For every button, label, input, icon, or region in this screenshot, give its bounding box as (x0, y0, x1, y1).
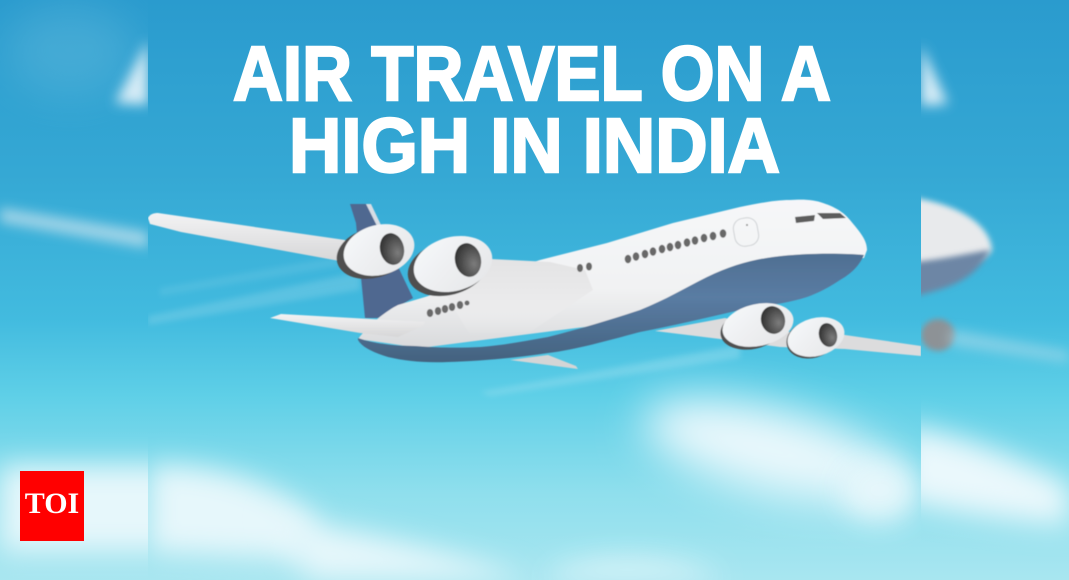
logo: TOI: TOI (25, 487, 79, 520)
far wing right (655, 318, 921, 356)
engine near right (720, 302, 794, 350)
title (233, 31, 831, 189)
wing root (468, 258, 592, 290)
belly (358, 254, 864, 362)
engine far left (336, 223, 416, 280)
clouds (148, 378, 920, 580)
fuselage (358, 200, 867, 348)
rear windows (427, 300, 470, 317)
logo: TOI (20, 471, 84, 541)
front windows (577, 229, 726, 272)
door (732, 217, 760, 247)
tailplane (270, 313, 398, 336)
tail fin (350, 204, 413, 318)
lower wing stub (510, 355, 578, 369)
panel: blurred right background (921, 0, 1069, 580)
contrail streaks (148, 256, 740, 396)
title: HIGH IN INDIA (289, 103, 780, 189)
airplane (148, 200, 921, 369)
cockpit windows (795, 213, 846, 223)
panel: centre sky background (148, 0, 921, 580)
engine near left (407, 235, 493, 297)
title: AIR TRAVEL ON A (233, 31, 831, 117)
engine far right (786, 316, 846, 360)
panel: blurred left background (0, 0, 148, 580)
left wing (148, 213, 345, 262)
